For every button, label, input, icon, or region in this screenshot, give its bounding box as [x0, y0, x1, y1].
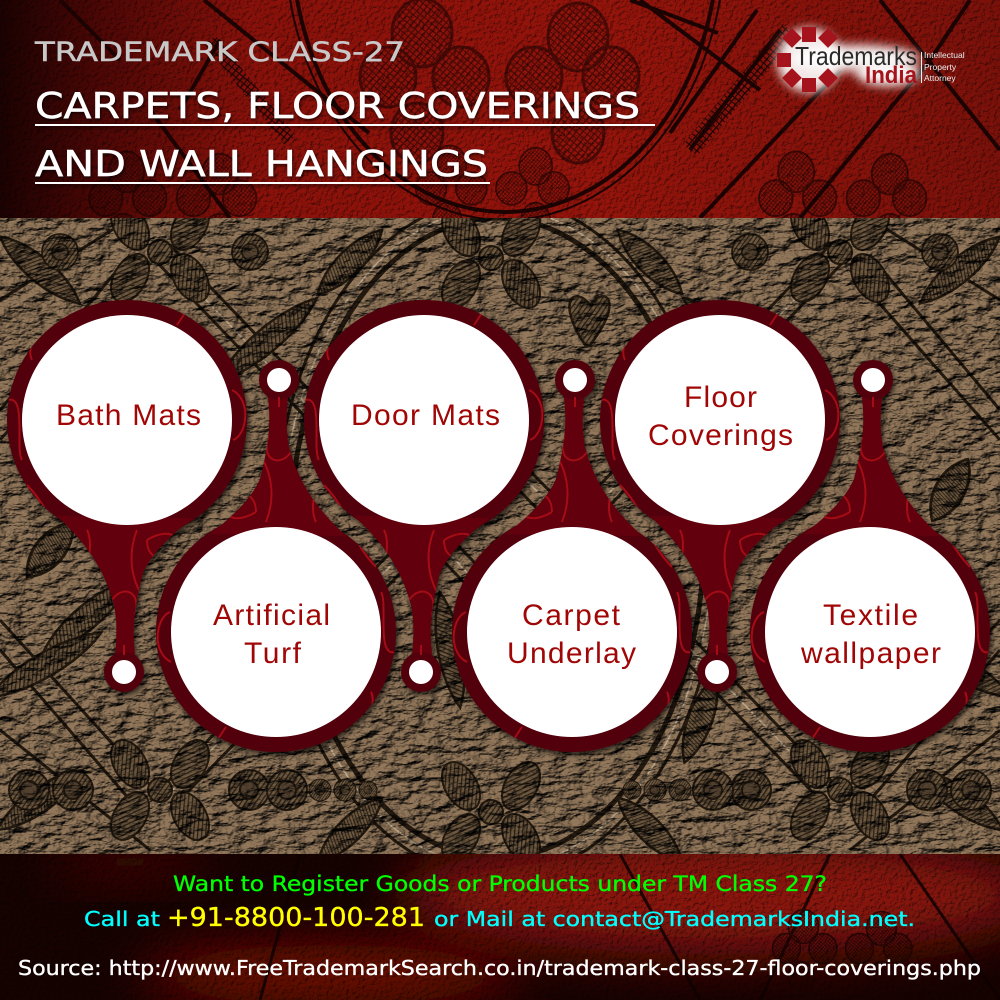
logo India: India — [865, 62, 918, 89]
label — [213, 599, 330, 670]
label: Artificial — [213, 599, 330, 632]
panel: Floor Coverings — [600, 300, 840, 692]
icon: logo squares — [777, 27, 838, 92]
logo tagline: Intellectual — [924, 50, 965, 60]
panel: Artificial Turf — [156, 360, 396, 752]
label — [507, 599, 636, 670]
label: Coverings — [648, 419, 793, 452]
panel: Carpet Underlay — [452, 360, 692, 752]
logo tagline: Property — [924, 62, 957, 72]
panel: Bath Mats — [7, 300, 247, 692]
panel: Textile wallpaper — [750, 360, 990, 752]
title block — [34, 37, 655, 185]
label: Floor — [684, 381, 757, 414]
contact line — [84, 903, 915, 933]
label: Bath Mats — [56, 399, 201, 432]
label: Door Mats — [351, 399, 500, 432]
logo tagline: Attorney — [924, 73, 956, 83]
heading line 2: AND WALL HANGINGS — [35, 144, 488, 185]
label: wallpaper — [800, 637, 941, 670]
carpet texture panel — [0, 195, 1000, 878]
label: Carpet — [522, 599, 621, 632]
label: Underlay — [507, 637, 636, 670]
label — [648, 381, 793, 452]
question line: Want to Register Goods or Products under TM Class 27? — [173, 872, 827, 896]
class label: TRADEMARK CLASS-27 — [34, 37, 405, 68]
panel: Door Mats — [304, 300, 544, 692]
contact line: Call at — [84, 907, 160, 931]
heading line 1: CARPETS, FLOOR COVERINGS — [35, 86, 640, 127]
label: Turf — [244, 637, 302, 670]
logo: Trademarks India — [777, 27, 965, 92]
contact line: or Mail at contact@TrademarksIndia.net. — [434, 907, 915, 931]
logo tagline — [924, 50, 965, 83]
header background — [0, 0, 1000, 218]
label: Textile — [823, 599, 918, 632]
logo wordmark: Trademarks — [795, 41, 917, 71]
footer call to action — [84, 872, 915, 933]
label — [800, 599, 941, 670]
source line: Source: http://www.FreeTrademarkSearch.co.in/trademark-class-27-floor-coverings.php — [18, 956, 981, 980]
footer background — [0, 854, 1000, 1000]
contact line: +91-8800-100-281 — [167, 903, 425, 933]
